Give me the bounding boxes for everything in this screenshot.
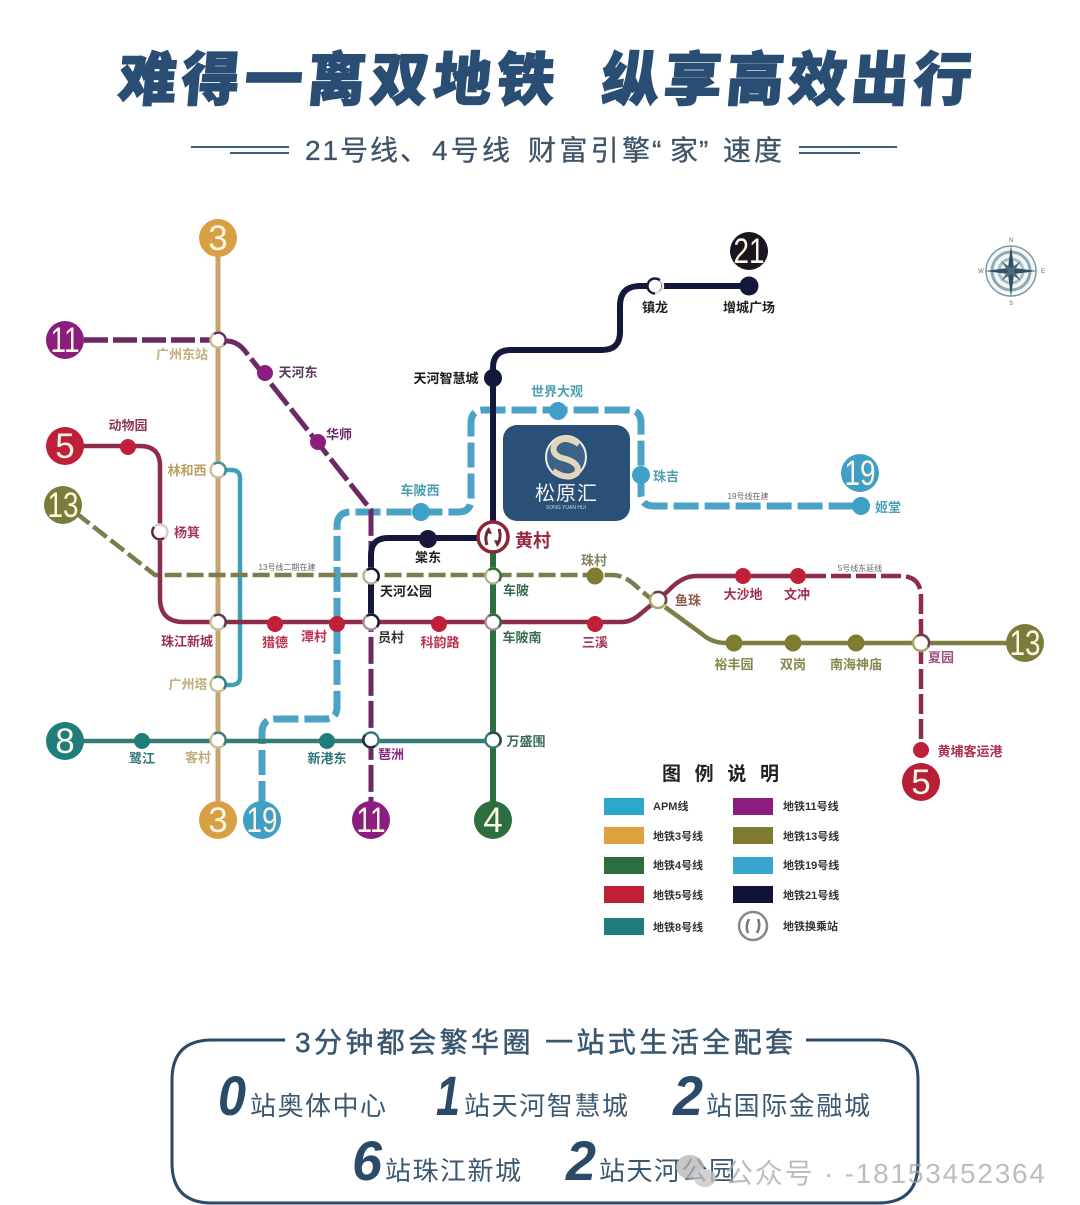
station labels: 杨箕 [174,525,200,540]
line badges: 3 [208,219,228,258]
legend [604,763,839,940]
station labels: 姬堂 [875,500,901,515]
station labels [108,300,1003,766]
line 21 [371,286,749,622]
station labels: 珠村 [581,553,607,568]
station labels: 天河公园 [380,584,432,599]
station labels: 大沙地 [723,587,763,602]
line badges: 11 [356,801,386,840]
legend: 地铁5号线 [653,888,703,902]
line badges: 21 [734,232,764,271]
bottom info box: 站天河公园 [599,1156,735,1186]
station labels: 文冲 [784,587,810,602]
line badges: 11 [50,321,80,360]
bottom info box: 3分钟都会繁华圈 一站式生活全配套 [295,1027,793,1058]
station labels: 科韵路 [420,635,460,650]
station labels: 广州东站 [156,347,208,362]
compass: E [1041,269,1045,275]
station labels: 动物园 [108,418,148,433]
station labels: 珠江新城 [161,634,213,649]
bottom info box: 6 [352,1129,383,1192]
line badges [44,219,1044,840]
station labels: 鹭江 [129,751,155,766]
bottom info box: 2 [565,1129,596,1192]
line 3 [216,250,220,810]
station labels: 19号线在建 [728,491,768,501]
station labels: 棠东 [415,550,441,565]
station labels: 车陂 [503,583,529,598]
legend: 地铁11号线 [783,799,839,813]
legend: 地铁8号线 [653,920,703,934]
line badges: 4 [483,801,503,840]
legend: 地铁3号线 [653,829,703,843]
APM line [226,470,240,685]
project logo panel [503,425,630,521]
station labels: 猎德 [262,635,288,650]
station labels: 5号线东延线 [838,563,882,573]
station labels: 广州塔 [168,677,208,692]
subtitle: “ [652,135,661,166]
legend: 地铁21号线 [783,888,839,902]
station labels: 员村 [378,630,404,645]
compass: S [1009,301,1013,307]
bottom info box [172,1027,918,1203]
title [116,48,975,113]
station labels: 鱼珠 [675,593,701,608]
subtitle: ” [699,135,708,166]
station labels: 潭村 [301,629,327,644]
station labels: 世界大观 [531,384,583,399]
station dots [120,276,929,758]
legend: 地铁换乘站 [783,919,838,933]
compass: W [978,269,984,275]
station labels: 三溪 [582,635,608,650]
station labels: 双岗 [780,657,806,672]
station labels: 裕丰园 [714,657,754,672]
station labels: 南海神庙 [830,657,882,672]
legend: 地铁4号线 [653,858,703,872]
bottom info box: 0 [218,1064,246,1127]
station labels: 华师 [326,427,352,442]
line 19 [262,410,860,806]
bottom info box: 1 [436,1064,460,1127]
line badges: 19 [844,454,876,493]
legend: 图例说明 [662,763,779,785]
subtitle [191,135,897,166]
title: 纵享高效出行 [599,48,975,113]
subtitle: 家 [670,135,698,166]
station labels: 林和西 [167,463,207,478]
station labels: 增城广场 [723,300,775,315]
legend: 地铁13号线 [783,829,839,843]
subtitle: 21号线、 [305,135,428,166]
station labels: 万盛围 [506,734,546,749]
compass [978,238,1045,307]
subtitle: 速度 [723,135,782,166]
station labels: 夏园 [928,650,954,665]
station labels: 镇龙 [642,300,668,315]
bottom info box: 站珠江新城 [385,1156,521,1186]
station labels: 天河智慧城 [413,371,479,386]
bottom info box: 站奥体中心 [250,1091,386,1121]
station labels: 车陂南 [502,630,542,645]
line badges: 5 [55,427,75,466]
bottom info box: 站天河智慧城 [464,1091,628,1121]
station labels: 13号线二期在建 [259,562,315,572]
interchange stations [152,278,929,748]
title: 难得一离双地铁 [116,48,558,113]
line badges: 3 [208,801,228,840]
station labels: 新港东 [307,751,347,766]
bottom info box: 站国际金融城 [706,1091,870,1121]
line 4 [490,545,496,808]
station labels: 珠吉 [653,469,679,484]
line 8 [80,739,493,743]
line 11 [84,340,371,810]
legend: 地铁19号线 [783,858,839,872]
compass: N [1009,238,1013,244]
station labels: 琶洲 [378,747,404,762]
line 5 [80,446,921,745]
line badges: 8 [55,722,75,761]
line badges: 13 [1010,624,1040,663]
subtitle: 财富引擎 [528,135,650,166]
legend: APM线 [653,799,688,813]
interchange: Huangcun [478,522,508,552]
watermark: 公众号 · -18153452364 [725,1158,1045,1189]
station labels: 天河东 [278,365,318,380]
station labels: 黄村 [515,530,551,551]
line badges: 13 [48,486,78,525]
station labels: 车陂西 [400,483,440,498]
project logo panel: SONG YUAN HUI [546,505,586,511]
bottom info box: 2 [672,1064,703,1127]
project logo panel: 松原汇 [535,482,597,505]
line 13 [76,513,1010,643]
station labels: 黄埔客运港 [937,744,1003,759]
station labels: 客村 [185,750,211,765]
subtitle: 4号线 [432,135,510,166]
line badges: 19 [246,801,278,840]
line badges: 5 [911,763,931,802]
